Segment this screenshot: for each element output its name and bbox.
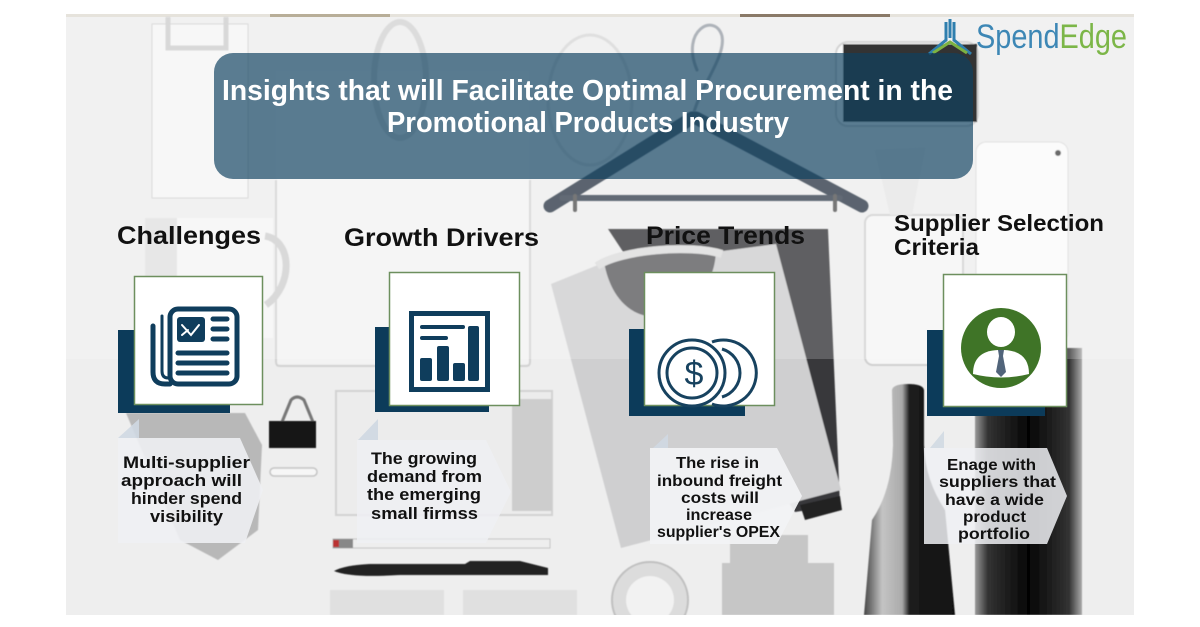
light overlay top half: [166, 18, 1082, 359]
navy backing block: [927, 330, 1045, 416]
paperclip: [270, 468, 317, 476]
tote bag: [152, 17, 248, 198]
necktie: [126, 413, 262, 560]
phone top right: [836, 42, 978, 126]
callout text: have a wide: [945, 492, 1044, 509]
white card: [944, 274, 1066, 406]
clothes hanger: [550, 25, 862, 210]
tape roll: [610, 560, 690, 615]
heading: Criteria: [894, 234, 979, 260]
callout text: supplier's OPEX: [657, 524, 780, 541]
callout text: visibility: [150, 508, 224, 526]
callout text: the emerging: [367, 486, 481, 504]
white card: [644, 272, 774, 406]
navy backing block: [118, 330, 230, 413]
black tube: [975, 348, 1082, 615]
heading: Growth Drivers: [344, 224, 539, 252]
large white bag: [275, 22, 530, 366]
title banner: [214, 53, 973, 179]
navy backing block: [629, 329, 745, 416]
callout text: small firmss: [371, 505, 478, 523]
cards at bottom: [330, 590, 577, 615]
callout fold: [358, 419, 378, 440]
callout fold: [930, 431, 944, 448]
callout text: demand from: [367, 468, 482, 486]
icon: coins: $: [685, 355, 704, 393]
hang-tag card: [722, 535, 834, 615]
callout text: portfolio: [958, 526, 1030, 543]
heading: Challenges: [117, 222, 261, 250]
white card: [390, 272, 520, 406]
callout text: Multi-supplier: [123, 454, 251, 472]
icon: report chart: [412, 314, 488, 390]
column: Price Trends: [629, 222, 805, 544]
logo icon: [929, 19, 971, 54]
folded shirt packet: [864, 214, 964, 366]
callout text: The growing: [371, 450, 477, 468]
callout text: costs will: [681, 490, 759, 507]
callout box: [357, 440, 511, 543]
wine bottle: [864, 384, 955, 615]
binder clip: [269, 397, 316, 448]
white card: [134, 276, 262, 404]
dark shirt: [608, 229, 840, 512]
column: Growth Drivers: [344, 224, 539, 543]
callout fold: [653, 434, 668, 448]
callout box: [118, 438, 263, 543]
callout text: product: [963, 509, 1027, 526]
mug: [146, 218, 290, 308]
pencil: [333, 539, 550, 548]
icon: newspaper: [153, 309, 237, 384]
white phone: [978, 142, 1066, 274]
callout text: suppliers that: [939, 474, 1057, 491]
callout fold: [118, 419, 139, 438]
icon: coins: [659, 340, 756, 406]
column: Challenges: [117, 222, 263, 543]
logo: SpendEdge: SpendEdge: [976, 18, 1127, 56]
title: Promotional Products Industry: [387, 107, 789, 139]
round tag outline: [560, 34, 620, 53]
callout text: Enage with: [947, 457, 1036, 474]
callout text: increase: [686, 507, 752, 524]
callout text: The rise in: [676, 455, 759, 472]
column: Supplier Selection Criteria: [894, 210, 1104, 544]
callout box: [650, 448, 802, 544]
white box: [336, 391, 552, 515]
pen: [334, 561, 548, 576]
callout box: [924, 448, 1067, 544]
top photo strip: [66, 14, 1134, 17]
callout text: inbound freight: [657, 473, 783, 490]
grey sweatshirt: [551, 244, 842, 548]
navy backing block: [375, 327, 489, 412]
icon: person in circle: [961, 308, 1041, 388]
callout text: approach will: [121, 472, 242, 490]
heading: Price Trends: [646, 222, 805, 250]
title: Insights that will Facilitate Optimal Procurement in the: [222, 75, 953, 107]
heading: Supplier Selection: [894, 210, 1104, 236]
callout text: hinder spend: [131, 490, 242, 508]
